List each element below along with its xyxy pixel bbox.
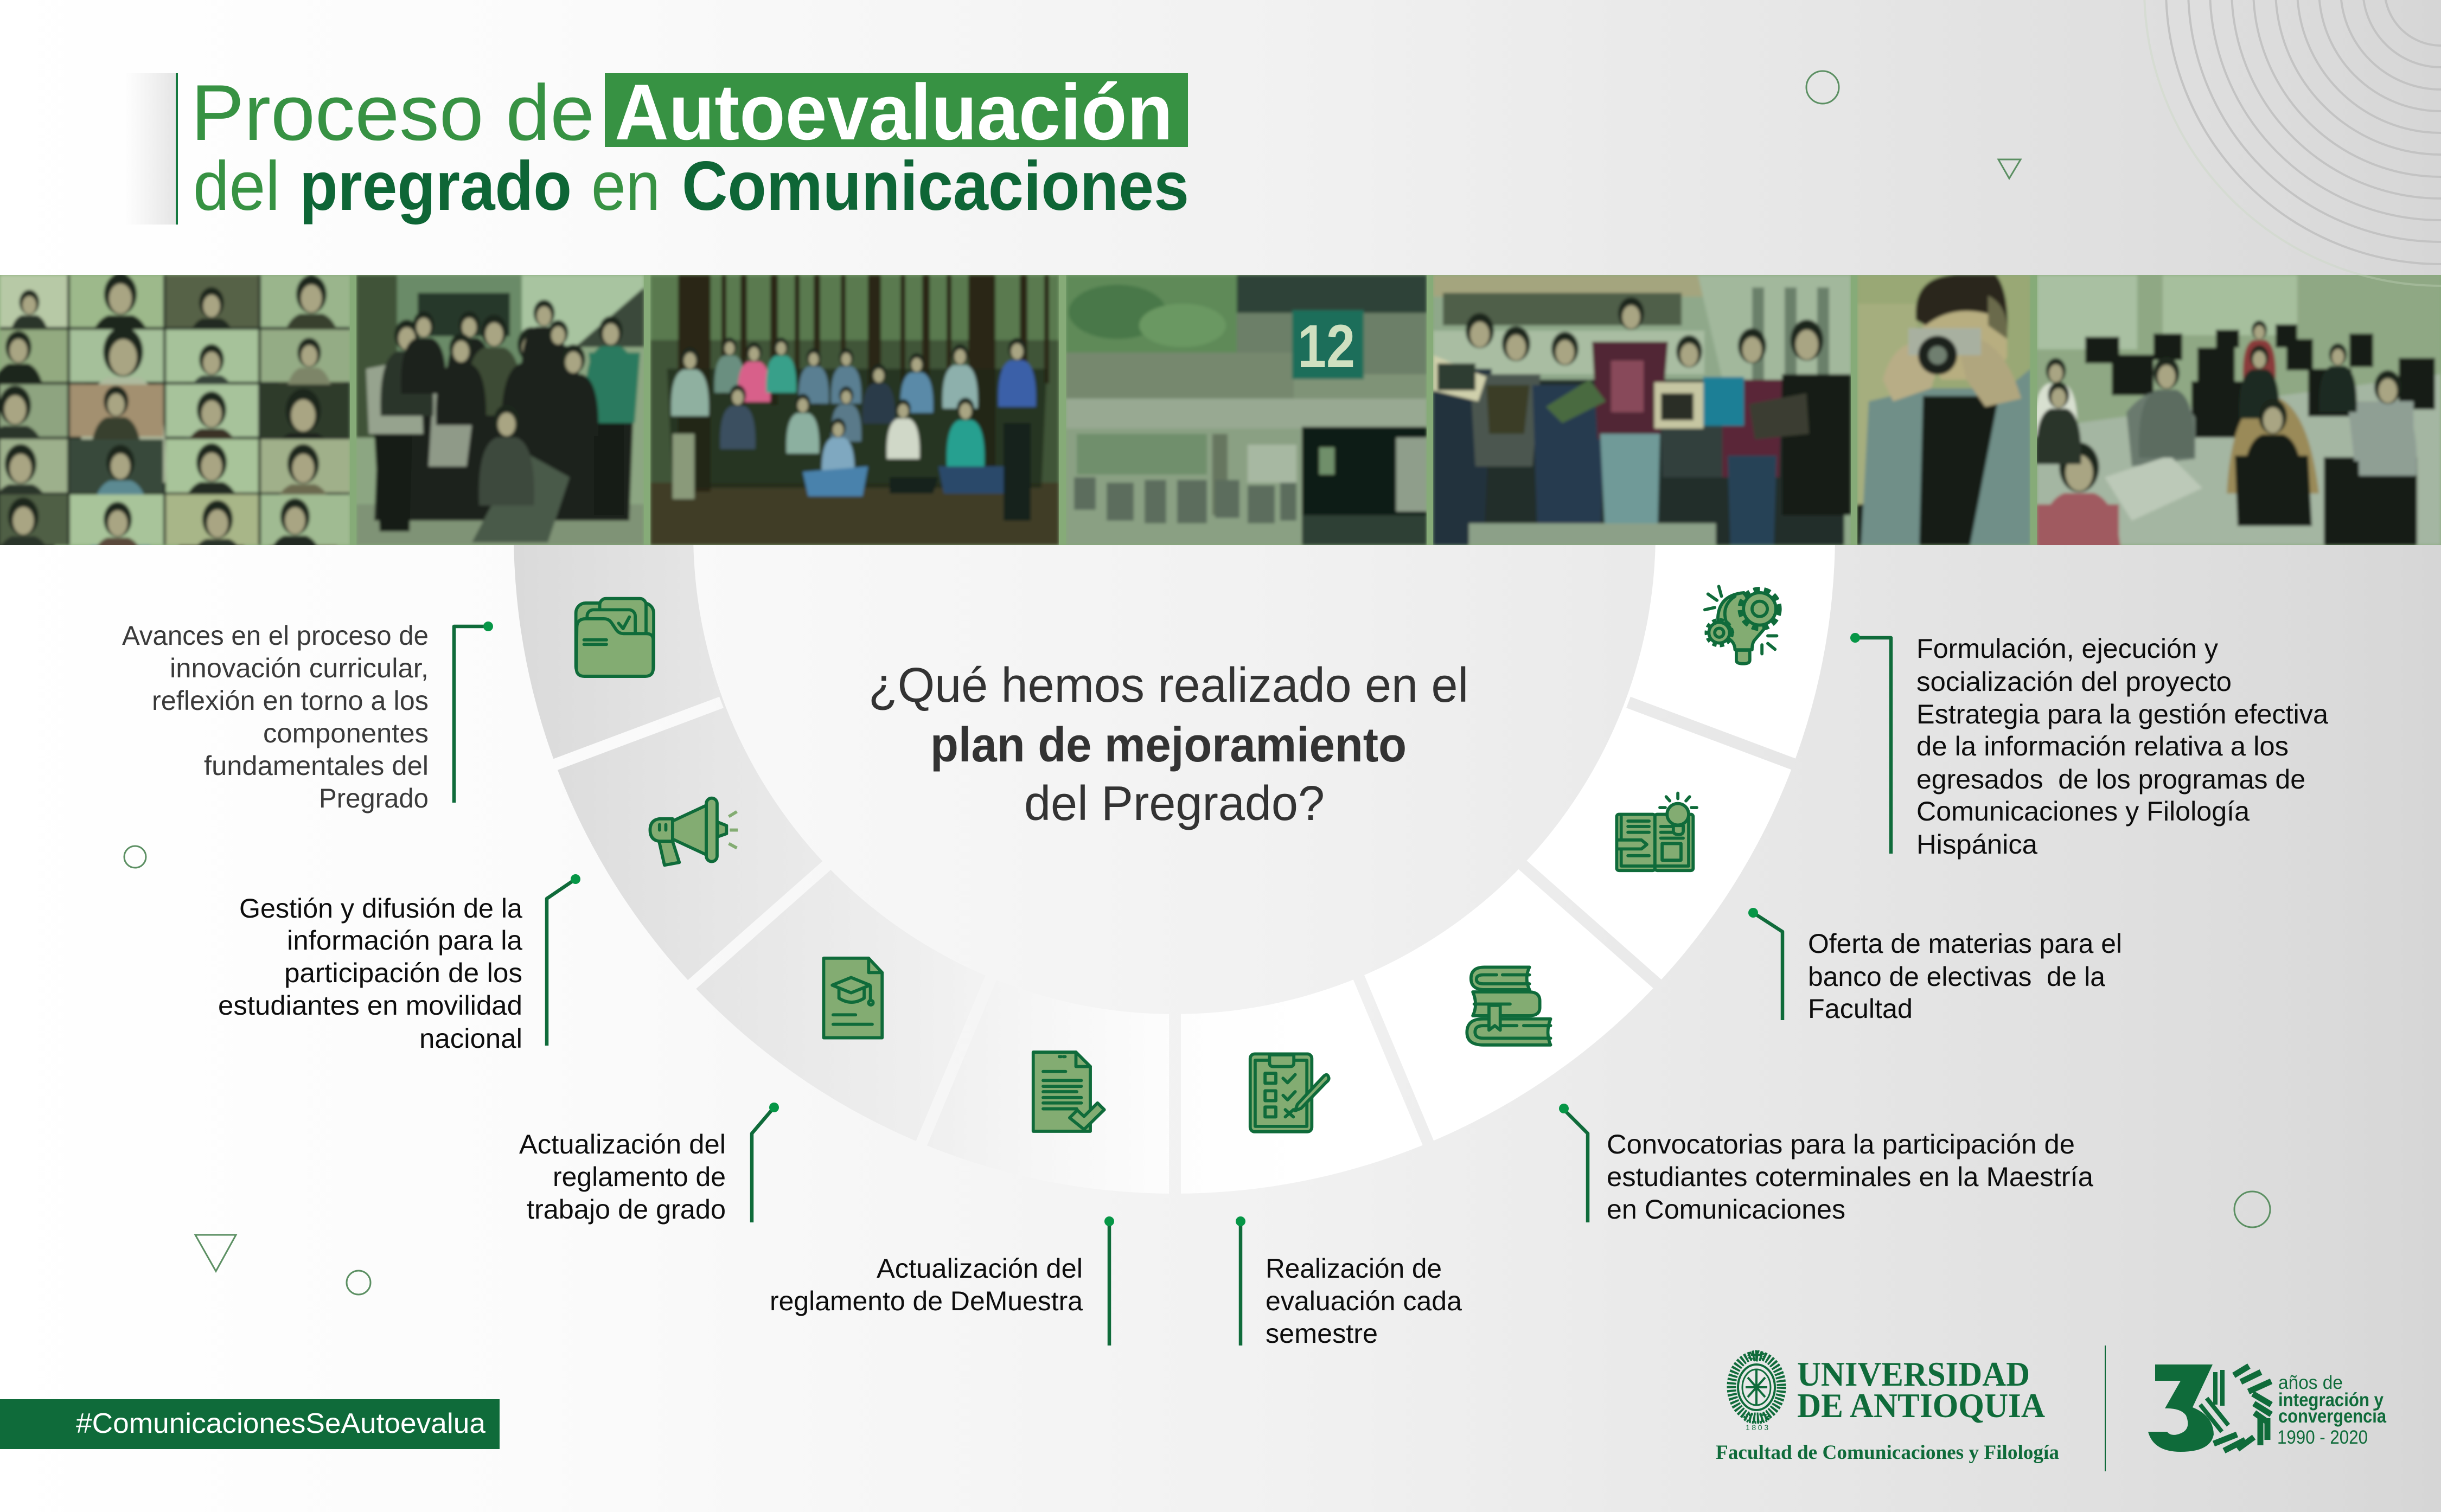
text: estudiantes coterminales en la Maestría: [1607, 1162, 2093, 1192]
text: Estrategia para la gestión efectiva: [1916, 699, 2328, 729]
connector: [547, 874, 580, 1046]
photo: computer lab: [2037, 275, 2441, 545]
text: Pregrado: [319, 783, 429, 813]
text: Convocatorias para la participación de: [1607, 1129, 2075, 1159]
title rule: [176, 73, 178, 225]
name: DE ANTIOQUIA: [1797, 1386, 2045, 1425]
text: fundamentales del: [204, 751, 429, 781]
text: Avances en el proceso de: [122, 620, 429, 651]
item 3: degree work rules: [519, 958, 882, 1225]
photo: video call collage: [0, 275, 350, 545]
seal: 1803: [1746, 1423, 1768, 1432]
item 5: evaluation: [1236, 1054, 1462, 1349]
decoration: lower-left circle: [347, 1271, 370, 1295]
text: de la información relativa a los: [1916, 731, 2289, 761]
text: Comunicaciones y Filología: [1916, 796, 2250, 827]
text: reglamento de DeMuestra: [770, 1286, 1083, 1316]
label: años de: [2278, 1372, 2343, 1393]
title line 2: [193, 148, 1189, 225]
text: [1607, 1129, 2093, 1225]
text: egresados de los programas de: [1916, 764, 2305, 795]
sign number: 12: [1298, 312, 1355, 380]
title line 1: Proceso de: [191, 68, 595, 157]
icon: megaphone: [650, 798, 738, 865]
connector: [1850, 633, 1891, 854]
logo divider: [2105, 1346, 2106, 1471]
icon: clipboard: [1250, 1054, 1329, 1132]
seal: [1731, 1350, 1781, 1432]
central question: [868, 658, 1468, 831]
connector: [1559, 1104, 1588, 1222]
icon: books: [1467, 967, 1551, 1045]
text: [519, 1129, 726, 1225]
photo: campus building with number 12: [1066, 275, 1427, 545]
text: [1808, 928, 2122, 1024]
text: evaluación cada: [1266, 1286, 1462, 1316]
icon: document with graduation cap: [823, 958, 882, 1038]
text: socialización del proyecto: [1916, 667, 2232, 697]
arc overlapping the photos: [2144, 0, 2441, 286]
item 8: graduates strategy: [1705, 586, 2328, 860]
title line 2: del: [193, 148, 280, 225]
decoration: left circle: [124, 846, 146, 868]
connector: [454, 622, 493, 803]
icon: bulb with gears: [1705, 586, 1779, 664]
name: [1716, 1355, 2059, 1464]
decoration: top triangle: [1998, 159, 2021, 178]
label: 1990 - 2020: [2277, 1427, 2368, 1448]
item 7: electives: [1616, 793, 2122, 1024]
title line 2: pregrado: [299, 148, 572, 225]
text: Realización de: [1266, 1253, 1442, 1284]
strip backing: [0, 275, 2441, 545]
label: integración y: [2278, 1389, 2384, 1411]
text: reglamento de: [553, 1162, 726, 1192]
name: UNIVERSIDAD: [1797, 1355, 2030, 1393]
text: banco de electivas de la: [1808, 962, 2105, 992]
icon: document with check: [1033, 1052, 1104, 1131]
numeral 3: [2148, 1364, 2214, 1452]
central question: del Pregrado?: [1024, 777, 1325, 831]
text: componentes: [263, 718, 429, 748]
text: [122, 620, 429, 813]
text: reflexión en torno a los: [152, 685, 429, 716]
decoration: concentric arcs: [2166, 0, 2441, 264]
semicircular ring: [514, 533, 1835, 1199]
title line 1: Autoevaluación: [615, 68, 1173, 156]
text: innovación curricular,: [170, 653, 429, 683]
hashtag bar: #ComunicacionesSeAutoevalua: [76, 1408, 485, 1439]
logo: Universidad de Antioquia: [1716, 1350, 2059, 1464]
text: Hispánica: [1916, 829, 2037, 860]
icon: book with bulb: [1616, 793, 1697, 870]
text: Facultad: [1808, 994, 1913, 1024]
text: Actualización del: [877, 1253, 1083, 1284]
central question: plan de mejoramiento: [930, 718, 1407, 772]
decoration: lower-left triangle: [195, 1235, 236, 1271]
text: Formulación, ejecución y: [1916, 633, 2218, 664]
text: [770, 1253, 1083, 1316]
label: convergencia: [2278, 1406, 2386, 1427]
item 1: innovation: [122, 599, 654, 813]
text: en Comunicaciones: [1607, 1194, 1845, 1225]
hashtag bar: [0, 1399, 500, 1449]
logo: 30 years: [2148, 1364, 2386, 1452]
item 2: mobility: [218, 798, 738, 1054]
text: participación de los: [284, 958, 522, 988]
connector: [1748, 908, 1782, 1020]
connector: [1236, 1216, 1245, 1346]
central question: ¿Qué hemos realizado en el: [868, 658, 1468, 713]
text: [1916, 633, 2328, 860]
connector: [752, 1103, 779, 1222]
title line 2: en: [591, 148, 660, 225]
photo: group in pine forest: [650, 275, 1059, 545]
label: [2277, 1372, 2386, 1448]
numeral 0 stripes: [2200, 1366, 2271, 1451]
text: información para la: [287, 925, 522, 956]
text: [218, 893, 522, 1054]
item 6: master's calls: [1467, 967, 2093, 1225]
name: Facultad de Comunicaciones y Filología: [1716, 1441, 2059, 1464]
text: trabajo de grado: [527, 1194, 726, 1225]
decoration: top circle: [1806, 71, 1839, 104]
photo strip: [0, 0, 2441, 545]
title shadow: [125, 73, 177, 225]
photo: students holding collages: [1433, 275, 1851, 545]
decoration: lower-right circle: [2234, 1191, 2270, 1227]
text: nacional: [419, 1023, 522, 1054]
text: Oferta de materias para el: [1808, 928, 2122, 959]
title line 1: [191, 68, 1173, 157]
text: [1266, 1253, 1462, 1349]
item 4: DeMuestra rules: [770, 1052, 1114, 1346]
connector: [1104, 1216, 1114, 1346]
text: semestre: [1266, 1318, 1378, 1349]
title highlight box: [605, 73, 1188, 147]
icon: folder: [576, 599, 654, 676]
title line 2: Comunicaciones: [682, 148, 1189, 225]
text: Gestión y difusión de la: [239, 893, 522, 924]
text: Actualización del: [519, 1129, 726, 1159]
photo: man with camera: [1857, 275, 2030, 545]
title: [125, 68, 1189, 225]
text: estudiantes en movilidad: [218, 990, 522, 1021]
photo: group at metro station: [356, 275, 644, 545]
